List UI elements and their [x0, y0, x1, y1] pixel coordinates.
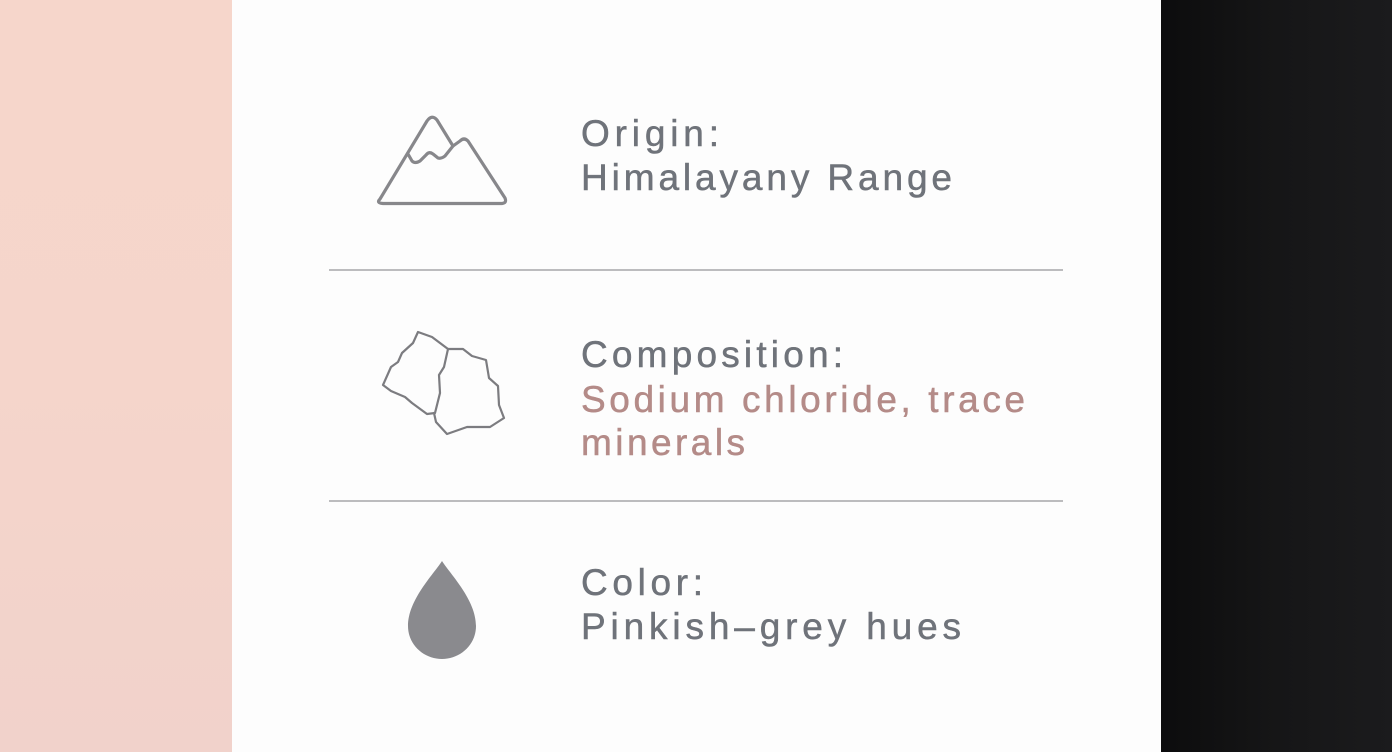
row 1 text: origin — [581, 113, 952, 198]
row 3 text: color: Pinkish–grey hues — [581, 606, 961, 647]
panel: pink side band — [0, 0, 232, 752]
row 3 text: color — [581, 562, 961, 647]
panel: dark side band — [1161, 0, 1392, 752]
icon: salt rocks — [383, 332, 504, 434]
row 1 text: origin: Origin: — [581, 113, 719, 154]
icon: colour drop — [408, 561, 476, 659]
panel: white content card — [232, 0, 1161, 752]
row 3 text: color: Color: — [581, 562, 703, 603]
row 2 text: composition — [581, 334, 1025, 463]
row 2 text: composition: minerals — [581, 422, 745, 463]
row 2 text: composition: Composition: — [581, 334, 843, 375]
icon: mountain — [379, 117, 506, 204]
row 1 text: origin: Himalayany Range — [581, 157, 952, 198]
row 2 text: composition: Sodium chloride, trace — [581, 379, 1025, 420]
